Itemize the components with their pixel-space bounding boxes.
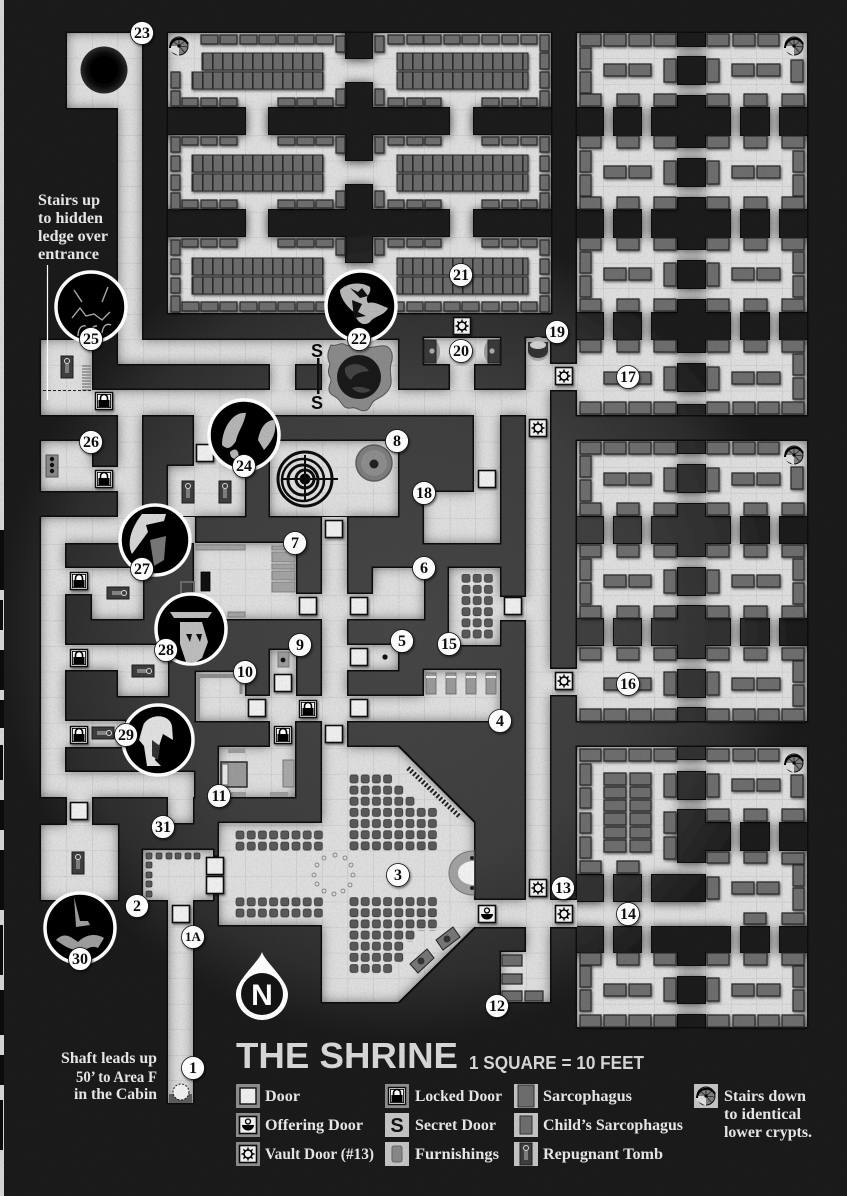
- callout: stairs up to hidden ledge: Stairs up: [38, 192, 100, 209]
- alcove thrones: [410, 927, 460, 973]
- marker 10: 10: [237, 664, 253, 681]
- marker 9: [288, 634, 312, 656]
- marker 30: 30: [72, 951, 88, 968]
- callout: shaft note: in the Cabin: [74, 1086, 157, 1103]
- marker 26: [80, 430, 102, 454]
- marker 11: [208, 784, 230, 808]
- organ along diagonal wall: [408, 768, 459, 816]
- altar dome: [449, 851, 474, 895]
- marker 18: 18: [416, 485, 432, 502]
- marker 1A: [182, 926, 204, 948]
- marker 29: 29: [118, 727, 134, 744]
- callout: shaft note: [61, 1050, 157, 1103]
- legend: offering door: Offering Door: [265, 1117, 363, 1134]
- marker 27: [130, 558, 154, 580]
- furnishings: stairs to hidden ledge: [82, 366, 91, 390]
- marker 29: [114, 724, 138, 746]
- legend: stairs down: [694, 1084, 812, 1141]
- marker 15: 15: [441, 636, 457, 653]
- altar stand in room 9: [278, 652, 289, 667]
- candle ring: [312, 853, 355, 896]
- marker 27: 27: [134, 561, 150, 578]
- marker 5: [390, 630, 414, 652]
- marker 8: 8: [393, 433, 401, 450]
- marker 28: [154, 638, 178, 662]
- blob pit room: [328, 344, 392, 411]
- pews in room 15: [460, 574, 493, 640]
- marker 13: 13: [555, 880, 571, 897]
- marker 14: 14: [620, 906, 636, 923]
- callout: stairs up to hidden ledge: ledge over: [38, 228, 108, 245]
- marker 20: 20: [453, 343, 469, 360]
- marker 8: [386, 430, 408, 452]
- legend: stairs down: lower crypts.: [724, 1124, 812, 1141]
- marker 28: 28: [158, 642, 174, 659]
- room 19 dome: [526, 337, 550, 361]
- callout: shaft note: Shaft leads up: [61, 1050, 157, 1067]
- legend: furnishings: Furnishings: [415, 1146, 499, 1163]
- callout: stairs up to hidden ledge: [38, 192, 108, 263]
- marker 24: 24: [236, 458, 252, 475]
- portrait 28: [156, 594, 226, 664]
- furnishings in room 7: [181, 545, 295, 617]
- legend: secret door: S: [390, 1115, 404, 1137]
- sarcophagi: [171, 34, 804, 1027]
- doors: [70, 318, 572, 922]
- marker 24: [232, 454, 256, 478]
- marker 11: 11: [211, 788, 227, 805]
- hole in room 5: [382, 654, 388, 660]
- legend: repugnant tomb: [514, 1142, 663, 1166]
- portrait 25: [56, 272, 126, 342]
- marker 23: 23: [134, 25, 150, 42]
- marker 2: [126, 894, 148, 918]
- marker 17: 17: [620, 369, 636, 386]
- marker 31: [152, 816, 174, 838]
- spiral well in room 8: [278, 452, 338, 506]
- portrait 24: [209, 400, 279, 470]
- marker 22: [348, 328, 370, 350]
- marker 30: [68, 948, 92, 970]
- legend: door: [236, 1084, 300, 1108]
- marker 3: 3: [394, 867, 402, 884]
- secret doors: S: [311, 393, 323, 413]
- marker 14: [616, 902, 640, 926]
- marker 1: [182, 1056, 204, 1080]
- legend: secret door: Secret Door: [415, 1117, 496, 1134]
- marker 10: [234, 660, 256, 684]
- marker 3: [386, 864, 410, 886]
- marker 25: [80, 328, 102, 350]
- marker 1A: 1A: [185, 929, 202, 944]
- icon: stairs down to lower crypts: [169, 37, 803, 773]
- marker 25: 25: [83, 331, 99, 348]
- legend: child's sarcophagus: Child’s Sarcophagus: [543, 1117, 683, 1134]
- legend: repugnant tomb: Repugnant Tomb: [543, 1146, 663, 1163]
- sarcophagus block rows: [192, 53, 528, 294]
- marker 2: 2: [133, 898, 141, 915]
- marker 26: 26: [83, 434, 99, 451]
- marker 9: 9: [296, 637, 304, 654]
- secret doors: S: [311, 341, 323, 361]
- marker 23: [130, 22, 154, 44]
- portrait 27: [120, 505, 190, 575]
- portrait 29: [123, 705, 193, 775]
- marker 6: [412, 556, 436, 580]
- room 12 benches: [502, 955, 543, 1001]
- furnishing: triple basin in room 26: [46, 455, 58, 477]
- marker 12: 12: [489, 998, 505, 1015]
- legend: furnishings: [385, 1142, 499, 1166]
- marker 7: [284, 532, 306, 554]
- child sarcophagi along left crypt walls: [171, 35, 549, 311]
- marker 19: [546, 320, 568, 344]
- gutter in room 10: [198, 676, 241, 721]
- marker 20: [450, 340, 472, 362]
- marker 18: [412, 482, 436, 504]
- marker 7: 7: [291, 535, 299, 552]
- marker 19: 19: [549, 324, 565, 341]
- marker 12: [486, 994, 508, 1018]
- millstone in room 8: [356, 445, 392, 481]
- legend: sarcophagus: [514, 1084, 632, 1108]
- legend: secret door: [385, 1113, 496, 1137]
- portrait 22: [326, 271, 396, 341]
- marker 4: 4: [496, 713, 504, 730]
- legend: vault door: [236, 1142, 374, 1166]
- marker 5: 5: [398, 633, 406, 650]
- marker 16: [616, 672, 640, 696]
- icon: pit in the corner room: [80, 46, 128, 94]
- marker 22: 22: [351, 331, 367, 348]
- room 20 statues: [424, 340, 500, 363]
- marker 17: [616, 366, 640, 388]
- legend: locked door: Locked Door: [415, 1088, 502, 1105]
- marker 6: 6: [420, 560, 428, 577]
- marker 1: 1: [189, 1060, 197, 1077]
- callout: stairs up to hidden ledge: to hidden: [38, 210, 103, 227]
- secret doors: [311, 341, 323, 413]
- marker 13: [552, 876, 574, 900]
- marker 16: 16: [620, 676, 636, 693]
- pews in room 2: [146, 853, 200, 897]
- bed and furniture in room 11: [221, 748, 294, 797]
- callout: stairs up to hidden ledge: entrance: [38, 246, 99, 263]
- legend: sarcophagus: Sarcophagus: [543, 1088, 632, 1105]
- portrait 30: [45, 893, 115, 963]
- legend: offering door: [236, 1113, 363, 1137]
- legend: stairs down: to identical: [724, 1106, 802, 1123]
- legend: locked door: [385, 1084, 502, 1108]
- legend: door: Door: [265, 1088, 300, 1105]
- crypt pillars and walls: [160, 25, 815, 1033]
- main hall pews: [235, 774, 439, 975]
- icon: north marker: [236, 952, 288, 1020]
- marker 4: [488, 710, 512, 732]
- icon: north marker: N: [251, 979, 273, 1012]
- callout: shaft note: 50’ to Area F: [76, 1069, 157, 1086]
- page edge sliver: [0, 0, 4, 1196]
- legend: stairs down: Stairs down: [724, 1088, 806, 1105]
- title: THE SHRINE: [236, 1035, 458, 1076]
- leader line and ledge outline: [43, 265, 92, 400]
- entry well at shaft base: [173, 1084, 189, 1100]
- repugnant tombs: [61, 356, 231, 874]
- marker 21: 21: [453, 267, 469, 284]
- marker 21: [450, 264, 472, 286]
- biers in room 4: [426, 673, 496, 694]
- scale note: 1 SQUARE = 10 FEET: [469, 1053, 644, 1073]
- shaft floor end: [169, 1094, 192, 1103]
- location markers: [68, 22, 640, 1080]
- legend: vault door: Vault Door (#13): [265, 1146, 374, 1163]
- legend: child's sarcophagus: [514, 1113, 683, 1137]
- marker 15: [438, 632, 460, 656]
- marker 31: 31: [155, 819, 171, 836]
